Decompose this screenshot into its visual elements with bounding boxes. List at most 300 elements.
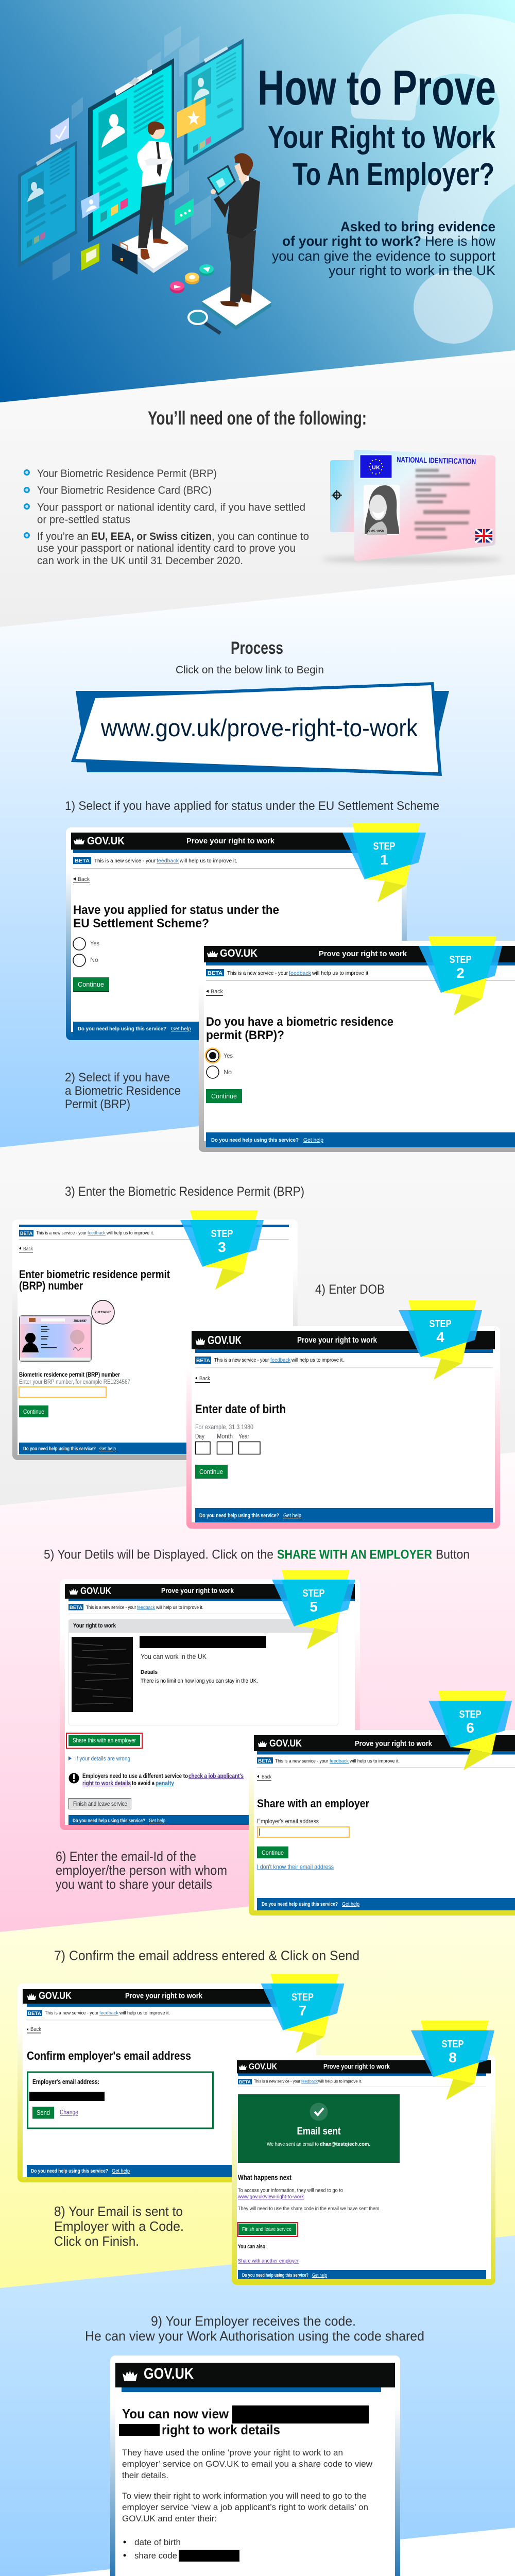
help footer: Get help (171, 1026, 191, 1032)
bullet: BRP: Your Biometric Residence Permit (BRP) (37, 468, 217, 480)
beta banner: This is a new service - your (86, 1605, 136, 1611)
beta banner: BETA (208, 970, 222, 976)
screenshot: step 3 (12, 1219, 298, 1460)
help footer (19, 1443, 293, 1454)
email sent panel: Email sent (297, 2126, 341, 2137)
beta banner: will help us to improve it. (349, 1758, 400, 1764)
help footer (238, 2270, 486, 2279)
service header (204, 946, 515, 965)
back link: Back (199, 1376, 210, 1382)
step 6 caption: you want to share your details (56, 1876, 212, 1892)
step 7 caption: 7) Confirm the email address entered & Click on Send (54, 1947, 359, 1963)
service header: Prove your right to work (161, 1586, 234, 1595)
right to work panel: Your right to work (73, 1623, 116, 1629)
step badge 4: 4 (436, 1329, 444, 1345)
date fields (195, 1432, 260, 1454)
help footer: Do you need help using this service? (31, 2168, 108, 2174)
email paragraph one (122, 2448, 373, 2480)
service header: Prove your right to work (125, 1992, 203, 2001)
beta banner (195, 1357, 493, 1368)
question heading: Share with an employer (257, 1797, 369, 1810)
step 3 caption: 3) Enter the Biometric Residence Permit (BRP) (65, 1184, 304, 1199)
title (258, 60, 496, 192)
email sent panel: dhan@testqtech.com. (320, 2141, 370, 2147)
question heading: Have you applied for status under the (73, 903, 279, 917)
step badge 7 (261, 1974, 344, 2053)
email header: GOV.UK (144, 2365, 194, 2382)
section background: gray requirements (0, 350, 515, 627)
bullet: EU citizen: EU, EEA, or Swiss citizen (91, 531, 212, 543)
further links: Share with another employer (238, 2258, 299, 2264)
finish button: Finish and leave service (73, 1800, 127, 1807)
email sent panel (238, 2094, 400, 2163)
help footer: Do you need help using this service? (78, 1026, 166, 1032)
BRP number field (19, 1372, 130, 1397)
illustration: translucent tiles (53, 26, 211, 281)
service header: GOV.UK (87, 835, 125, 847)
beta banner: will help us to improve it. (312, 970, 370, 976)
step badge 2 (419, 936, 502, 1015)
help footer: Get help (312, 2273, 327, 2278)
what happens next (237, 2173, 381, 2212)
continue button: Continue (211, 1092, 237, 1100)
status text: You can work in the UK (141, 1652, 207, 1660)
help footer: Get help (112, 2168, 130, 2174)
EU flag: UK (372, 465, 380, 471)
beta banner: This is a new service - your (94, 858, 156, 864)
finish button highlighted: Finish and leave service (242, 2226, 291, 2232)
help footer: Do you need help using this service? (242, 2273, 308, 2278)
redacted photo (72, 1637, 133, 1712)
hero panel (0, 0, 515, 402)
employer warning: check a job applicant's (188, 1773, 244, 1780)
share button highlighted: Share this with an employer (73, 1737, 136, 1744)
screenshot: step 1 (66, 827, 407, 1040)
icon: chat tile (175, 198, 194, 226)
help footer: Do you need help using this service? (73, 1818, 145, 1824)
beta banner: BETA (70, 1605, 82, 1611)
help footer: Get help (99, 1446, 116, 1452)
step badge 8 (411, 2021, 494, 2100)
radio buttons: Yes (90, 940, 99, 947)
intro text: of your right to work? (282, 233, 421, 249)
what happens next: What happens next (238, 2173, 291, 2181)
beta banner: BETA (28, 2011, 41, 2016)
illustration: man with tablet (207, 153, 260, 307)
screenshot: step 5 (60, 1579, 360, 1830)
radio buttons (205, 1048, 233, 1078)
beta banner: will help us to improve it. (119, 2010, 170, 2016)
step badge 5 (272, 1570, 355, 1649)
beta banner (206, 969, 515, 981)
illustration: man with crossed arms (137, 122, 173, 260)
bullet: passport: or pre-settled status (37, 514, 130, 526)
step 9 caption (85, 2313, 424, 2344)
step badge 1: 1 (380, 852, 388, 868)
email heading: You can now view (122, 2406, 229, 2421)
continue button (206, 1089, 242, 1103)
screenshot: step 2 (199, 941, 515, 1152)
further links (238, 2244, 299, 2264)
help footer: Get help (342, 1901, 359, 1907)
step 8 caption (54, 2204, 184, 2249)
date fields: Month (217, 1432, 233, 1440)
question heading (19, 1268, 170, 1292)
email field: Employer's email address (257, 1818, 319, 1825)
step badge 6: STEP (459, 1709, 481, 1720)
beta banner (68, 1604, 347, 1614)
beta banner: will help us to improve it. (106, 1230, 154, 1236)
step badge 6: 6 (466, 1720, 474, 1736)
beta banner: will help us to improve it. (318, 2078, 362, 2083)
question heading: permit (BRP)? (206, 1028, 284, 1042)
intro text (272, 219, 495, 278)
step badge 3: STEP (211, 1228, 233, 1240)
screenshot: step 4 (186, 1326, 500, 1529)
beta banner: feedback (289, 970, 312, 976)
beta banner (27, 2010, 316, 2021)
help footer: Do you need help using this service? (199, 1513, 279, 1519)
email list (124, 2537, 239, 2562)
step 8 caption: 8) Your Email is sent to (54, 2204, 183, 2219)
EU flag (360, 455, 392, 478)
back link: Back (78, 876, 90, 883)
back link: Back (23, 1246, 33, 1252)
further links: You can also: (238, 2244, 267, 2250)
beta banner: feedback (137, 1605, 155, 1611)
back link: Back (262, 1774, 272, 1780)
screenshot: step 9 email (110, 2355, 400, 2576)
step badge 6 (428, 1691, 512, 1770)
beta banner (73, 857, 402, 869)
magnified BRP number: ZU1234567 (95, 1311, 111, 1314)
bullet: EU citizen: use your passport or national identity card to prove you (37, 543, 296, 554)
help footer (257, 1898, 515, 1910)
service header: Prove your right to work (319, 950, 407, 958)
step badge 8: 8 (449, 2049, 457, 2065)
icon: magnifier (188, 311, 220, 333)
beta banner: feedback (88, 1230, 106, 1236)
help footer: Do you need help using this service? (211, 1137, 299, 1143)
email list: date of birth (134, 2537, 181, 2547)
screenshot: step 7 (18, 1984, 321, 2182)
bullet: BRC: Your Biometric Residence Card (BRC) (37, 484, 212, 497)
employer warning: Employers need to use a different service to (82, 1773, 188, 1780)
service header (71, 833, 402, 853)
step 6 caption: employer/the person with whom (56, 1862, 227, 1878)
beta banner: feedback (330, 1758, 349, 1764)
step badge 8: STEP (442, 2039, 464, 2050)
email heading (119, 2405, 369, 2437)
details link: If your details are wrong (75, 1756, 130, 1762)
step badge 7: 7 (299, 2003, 306, 2019)
finish button highlighted (238, 2223, 298, 2236)
question heading: (BRP) number (19, 1279, 83, 1292)
back link: Back (211, 989, 223, 995)
finish button (69, 1798, 131, 1809)
beta banner: This is a new service - your (227, 970, 288, 976)
what happens next: They will need to use the share code in the email we have sent them. (238, 2206, 381, 2212)
beta banner: BETA (75, 858, 90, 864)
email sent panel: We have sent an email to (267, 2141, 319, 2147)
question heading: EU Settlement Scheme? (73, 917, 209, 930)
date fields: Day (195, 1432, 204, 1440)
hero background (0, 0, 515, 402)
section background: blue process (0, 574, 515, 1147)
UK flag (475, 529, 492, 543)
employer warning (69, 1773, 244, 1787)
icon: star tile (177, 98, 205, 138)
service header: GOV.UK (208, 1333, 242, 1347)
back link (257, 1774, 272, 1781)
beta banner: BETA (20, 1231, 32, 1236)
step badge 1 (342, 823, 426, 902)
service header: GOV.UK (269, 1738, 302, 1749)
illustration: national identification card (322, 450, 502, 564)
beta banner (238, 2078, 486, 2087)
beta banner: feedback (270, 1357, 291, 1363)
BRP number field: Biometric residence permit (BRP) number (19, 1372, 120, 1378)
step 9 caption: 9) Your Employer receives the code. (151, 2313, 356, 2329)
intro text: Here is how (425, 233, 495, 249)
status text (141, 1652, 258, 1684)
right to work panel (68, 1619, 338, 1725)
card front (354, 450, 495, 561)
beta banner: will help us to improve it. (291, 1357, 344, 1363)
email link: I don't know their email address (257, 1863, 334, 1870)
email paragraph two: GOV.UK and enter their: (122, 2514, 217, 2523)
step 2 caption (65, 1071, 181, 1111)
icon: user tile (81, 192, 99, 218)
back link (27, 2026, 41, 2033)
confirmation box (28, 2072, 213, 2128)
help footer (73, 1022, 402, 1037)
section background: gray steps 3-4 (0, 1093, 515, 1505)
card back (330, 460, 354, 532)
card shadow (322, 555, 502, 564)
step badge 2: STEP (449, 954, 472, 965)
status text: There is no limit on how long you can stay in the UK. (141, 1678, 258, 1684)
beta banner: feedback (157, 858, 179, 864)
help footer (206, 1132, 515, 1147)
step badge 4: STEP (430, 1318, 451, 1330)
service header: GOV.UK (249, 2062, 278, 2071)
beta banner: This is a new service - your (36, 1230, 87, 1236)
email field (257, 1818, 349, 1837)
share button highlighted (66, 1733, 142, 1749)
section background: yellow steps 7-8 (0, 1879, 515, 2288)
beta banner (257, 1757, 515, 1768)
BRP sample card: ZU1234567 (74, 1320, 87, 1323)
step 5 caption: Button (436, 1548, 470, 1562)
back link (19, 1246, 33, 1252)
question heading (206, 1015, 393, 1042)
step badge 1: STEP (373, 841, 396, 852)
service header (192, 1331, 495, 1353)
banner face (76, 685, 438, 772)
step badge 7: STEP (291, 1992, 314, 2003)
portrait photo (364, 485, 400, 535)
bullet: EU citizen: , you can continue to (212, 531, 309, 543)
service header: GOV.UK (220, 947, 258, 959)
email paragraph one: They have used the online ‘prove your right to work to an (122, 2448, 343, 2458)
step 6 caption: 6) Enter the email-Id of the (56, 1849, 196, 1864)
step 5 caption (44, 1548, 470, 1562)
step badge 3 (180, 1210, 264, 1290)
screenshot: step 8 (232, 2055, 495, 2285)
section background: pink steps 5-6 (0, 1452, 515, 1932)
date hint: For example, 31 3 1980 (195, 1423, 253, 1431)
email header (115, 2363, 395, 2392)
step badge 5: STEP (303, 1588, 324, 1599)
service header: GOV.UK (39, 1991, 72, 2002)
beta banner: will help us to improve it. (156, 1605, 203, 1611)
icon: briefcase (112, 242, 138, 275)
beta banner: feedback (99, 2010, 118, 2016)
BRP number field: Enter your BRP number, for example RE1234567 (19, 1379, 130, 1385)
beta banner (19, 1230, 289, 1240)
continue button (19, 1405, 48, 1417)
question heading: Enter date of birth (195, 1402, 286, 1416)
question heading: Do you have a biometric residence (206, 1015, 393, 1029)
service header: Prove your right to work (297, 1336, 377, 1345)
beta banner: This is a new service - your (45, 2010, 98, 2016)
magnified BRP number (92, 1300, 114, 1324)
step 2 caption: Permit (BRP) (65, 1097, 130, 1111)
what happens next: www.gov.uk/view-right-to-work (237, 2194, 304, 2200)
beta banner: feedback (301, 2078, 318, 2083)
continue button: Continue (199, 1468, 223, 1476)
confirmation box: Change (60, 2108, 78, 2116)
heading: what you need: You’ll need one of the following: (148, 408, 367, 429)
back link: Back (30, 2026, 41, 2032)
illustration: platform one (120, 225, 188, 273)
BRP sample card (20, 1316, 91, 1361)
help footer (195, 1508, 493, 1522)
icon: mail tile (81, 243, 99, 270)
email heading: right to work details (162, 2422, 280, 2437)
service header: Prove your right to work (323, 2063, 390, 2071)
step 8 caption: Click on Finish. (54, 2233, 139, 2249)
continue button: Continue (23, 1408, 44, 1415)
radio buttons (73, 938, 99, 967)
bullet: EU citizen: can work in the UK until 31 December 2020. (37, 555, 243, 567)
employer warning: penalty (156, 1781, 175, 1787)
question heading (73, 903, 279, 930)
link banner (71, 682, 449, 776)
banner ribbon (76, 691, 449, 772)
beta banner: This is a new service - your (275, 1758, 328, 1764)
step 1 caption: 1) Select if you have applied for status under the EU Settlement Scheme (65, 799, 439, 813)
continue button (195, 1465, 228, 1479)
redacted name (140, 1636, 266, 1648)
continue button (257, 1846, 288, 1858)
step 5 caption: 5) Your Detils will be Displayed. Click on the (44, 1548, 273, 1562)
illustration: platform two (202, 281, 271, 330)
back link (195, 1376, 210, 1383)
radio buttons: No (90, 956, 98, 963)
beta banner: will help us to improve it. (179, 858, 237, 864)
service header: Prove your right to work (355, 1739, 433, 1748)
illustration: main clipboard (88, 58, 174, 243)
email list: share code (134, 2551, 177, 2561)
radio buttons: Yes (224, 1052, 233, 1059)
portrait photo: 22.05.1959 (367, 530, 384, 533)
help footer: Do you need help using this service? (262, 1901, 338, 1907)
confirmation box: Send (37, 2109, 50, 2116)
employer warning: right to work details (82, 1781, 131, 1787)
email paragraph two: To view their right to work information you will need to go to the (122, 2491, 367, 2501)
heading: process: Process (231, 638, 283, 658)
email paragraph one: their details. (122, 2470, 168, 2480)
beta banner: This is a new service - your (214, 1357, 269, 1363)
help footer: Do you need help using this service? (23, 1446, 96, 1452)
beta banner: BETA (239, 2079, 251, 2084)
screenshot: step 6 (249, 1730, 515, 1916)
step 4 caption: 4) Enter DOB (315, 1282, 385, 1297)
employer warning: to avoid a (132, 1781, 154, 1787)
step badge 5: 5 (310, 1599, 318, 1615)
step 9 caption: He can view your Work Authorisation using the code shared (85, 2328, 424, 2344)
illustration: right clipboard (184, 39, 244, 165)
blurred card details (415, 469, 470, 539)
status text: Details (141, 1669, 158, 1675)
service header: Prove your right to work (186, 837, 275, 845)
help footer: Get help (303, 1137, 323, 1143)
help footer: Get help (283, 1513, 301, 1519)
step badge 3: 3 (218, 1239, 226, 1255)
back link (206, 989, 223, 996)
date fields: Year (238, 1432, 250, 1440)
step 2 caption: a Biometric Residence (65, 1084, 181, 1098)
process subheading: Click on the below link to Begin (176, 664, 324, 676)
service header (237, 2060, 491, 2076)
back link (73, 876, 90, 883)
service header (23, 1989, 316, 2007)
bullet: passport (25, 502, 305, 526)
card heading: NATIONAL IDENTIFICATION (397, 455, 476, 466)
intro text: your right to work in the UK (329, 263, 495, 278)
email paragraph two: employer service ‘view a job applicant’s right to work details’ on (122, 2502, 368, 2512)
step 8 caption: Employer with a Code. (54, 2218, 184, 2234)
illustration: left clipboard (18, 141, 77, 267)
bullet: passport: Your passport or national identity card, if you have settled (37, 502, 305, 513)
banner border (71, 682, 442, 776)
beta banner: BETA (196, 1358, 210, 1364)
help footer (68, 1815, 355, 1825)
continue button (73, 977, 109, 992)
beta banner: This is a new service - your (254, 2078, 300, 2083)
icon: large question mark watermark (351, 14, 515, 344)
service header (65, 1584, 355, 1601)
help footer (27, 2165, 316, 2177)
email paragraph one: employer’ service on GOV.UK to email you a share code to view (122, 2459, 373, 2469)
icon: check tile (50, 117, 69, 145)
continue button: Continue (262, 1849, 284, 1856)
what happens next: To access your information, they will need to go to (238, 2188, 343, 2194)
requirement list (25, 468, 309, 567)
blue strip (19, 1225, 289, 1227)
step 5 caption: SHARE WITH AN EMPLOYER (277, 1548, 432, 1562)
service header: GOV.UK (80, 1586, 111, 1596)
email paragraph two (122, 2491, 368, 2523)
radio buttons: No (224, 1069, 232, 1076)
continue button: Continue (78, 980, 104, 988)
question heading: Enter biometric residence permit (19, 1268, 170, 1281)
confirmation box: Employer's email address: (32, 2078, 99, 2086)
bullet: EU citizen (25, 531, 309, 567)
service header (254, 1735, 515, 1755)
